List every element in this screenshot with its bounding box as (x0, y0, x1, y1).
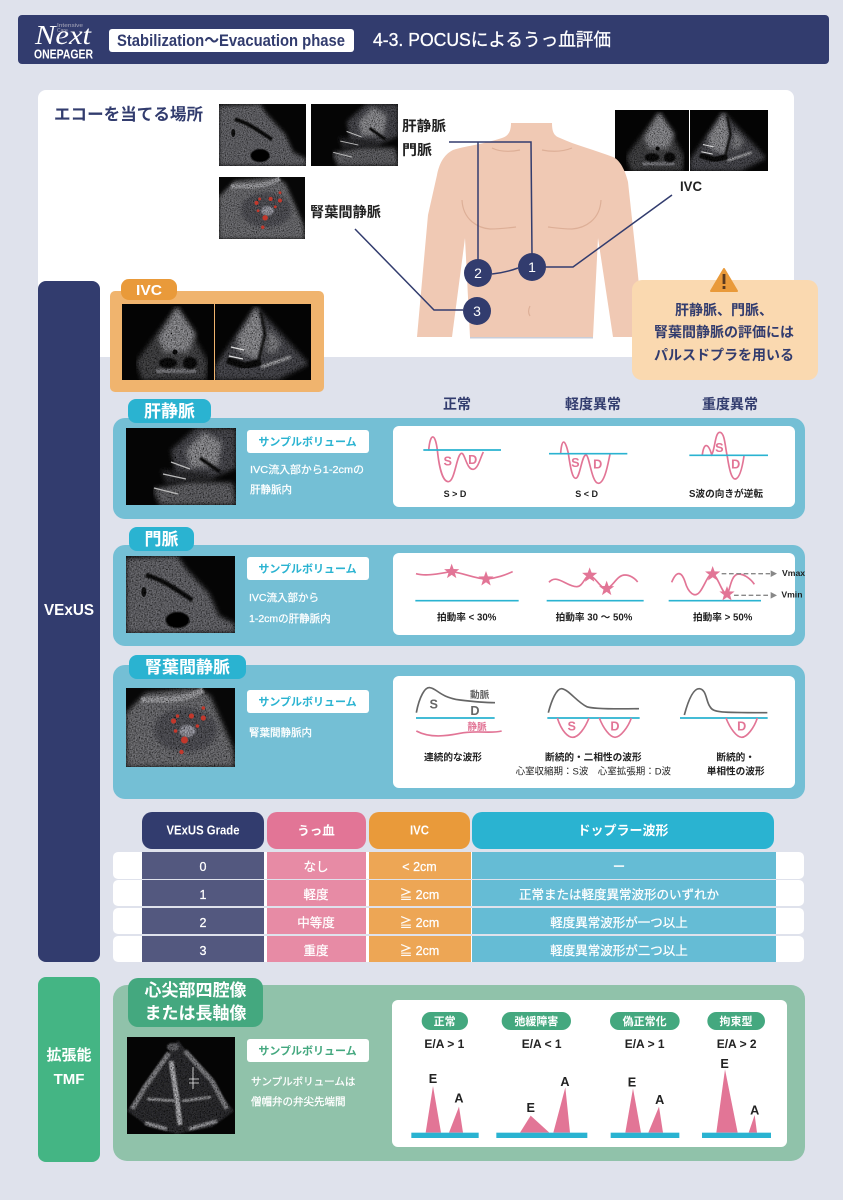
row: grade 3 (113, 936, 804, 962)
row: grade 3: ≧ 2cm (400, 943, 439, 958)
sample volume text: 僧帽弁の弁尖先端間 (251, 1095, 346, 1108)
waveform: pulsatility over 50% (669, 566, 761, 623)
table header: IVC (410, 822, 430, 838)
sidebar: VExUS: VExUS (44, 602, 94, 619)
TMF: restrictive: E/A > 2 (717, 1037, 757, 1051)
waveform: severe S reversal: S (715, 441, 724, 455)
row: grade 2 (113, 908, 804, 934)
logo: Intensive Care Next Onepager: Next (34, 20, 93, 50)
table header: VExUS Grade (166, 822, 240, 838)
sample volume text: IVC流入部から1-2cmの (250, 464, 364, 476)
waveform: mild S<D: S < D (575, 489, 599, 499)
row: grade 0 (113, 852, 804, 879)
callout: pulsed doppler note: パルスドプラを用いる (654, 347, 794, 363)
waveform: severe S reversal: D (731, 458, 740, 472)
TMF: restrictive: 拘束型 (720, 1014, 752, 1028)
echo image: kidney (126, 688, 235, 767)
callout: pulsed doppler note (632, 269, 818, 380)
row: grade 3: 軽度異常波形が二つ以上 (550, 943, 688, 958)
sample volume pill (247, 557, 369, 580)
panel: hepatic vein (113, 399, 805, 519)
sample volume text: 1-2cmの肝静脈内 (249, 612, 331, 625)
waveform: monophasic: D (737, 719, 746, 733)
waveforms: hepatic vein (393, 426, 795, 507)
tab: interlobar vein: 腎葉間静脈 (145, 658, 230, 677)
label: IVC: IVC (680, 178, 702, 194)
TMF: impaired relaxation (496, 1012, 587, 1138)
tab: apical four chamber view: 心尖部四腔像 (144, 981, 246, 1000)
sidebar: VExUS (38, 281, 100, 962)
TMF: normal: E/A > 1 (424, 1037, 465, 1051)
marker 3 (463, 297, 491, 325)
heading: probe placement: エコーを当てる場所 (54, 105, 204, 124)
panel: TMF (113, 978, 805, 1161)
sample volume text: IVC流入部から (249, 592, 319, 604)
logo: Intensive Care Next Onepager (34, 20, 93, 62)
waveform: continuous: 静脈 (467, 721, 487, 733)
waveform: mild S<D: S (571, 456, 580, 470)
echo image: kidney (219, 177, 305, 239)
TMF: pseudonormal: 偽正常化 (623, 1014, 667, 1028)
tab: IVC: IVC (136, 282, 162, 299)
column heading: severe: 重度異常 (702, 396, 758, 412)
marker 1 (518, 253, 546, 281)
marker 2: 2 (474, 265, 482, 281)
Vmin arrow (734, 589, 803, 599)
TMF: normal (411, 1012, 479, 1138)
sidebar: diastolic function TMF (38, 977, 100, 1162)
marker 3: 3 (473, 303, 481, 319)
waveform: continuous (416, 688, 502, 763)
row: grade 1: 軽度 (303, 887, 329, 902)
waveform: normal S>D: S > D (444, 489, 467, 499)
waveform: pulsatility 30-50%: 拍動率 30 〜 50% (556, 611, 633, 623)
TMF: restrictive (702, 1012, 771, 1138)
row: grade 2: 中等度 (297, 915, 335, 930)
TMF: pseudonormal: E (628, 1075, 636, 1089)
TMF: pseudonormal: A (655, 1093, 664, 1107)
column heading: mild: 軽度異常 (565, 396, 621, 412)
logo: Intensive Care Next Onepager: Intensive (57, 23, 83, 29)
TMF: impaired relaxation: 弛緩障害 (514, 1014, 558, 1028)
marker 2 (464, 259, 492, 287)
waveform: mild S<D: D (593, 458, 602, 472)
sample volume text: 肝静脈内 (250, 483, 292, 496)
Vmax arrow: Vmax (782, 568, 805, 578)
waveform: pulsatility over 50%: 拍動率 > 50% (693, 611, 753, 623)
table header: ドップラー波形 (577, 823, 669, 838)
TMF: restrictive: A (750, 1104, 759, 1118)
tab: IVC (121, 279, 177, 300)
TMF: normal: 正常 (434, 1014, 456, 1028)
sample volume pill: サンプルボリューム (258, 562, 357, 576)
waveform: biphasic: D (610, 719, 620, 733)
sample volume pill (247, 690, 369, 713)
echo image: portal vein (219, 104, 306, 166)
tab: interlobar vein (129, 655, 246, 679)
echo image: hepatic vein (126, 428, 236, 505)
panel: IVC (110, 279, 324, 392)
page title: 4-3. POCUSによるうっ血評価 (373, 30, 611, 50)
sample volume pill (247, 430, 369, 453)
TMF: impaired relaxation: E/A < 1 (522, 1037, 562, 1051)
Vmax arrow (722, 568, 805, 578)
tab: portal vein: 門脈 (144, 530, 178, 549)
callout: pulsed doppler note: 腎葉間静脈の評価には (654, 324, 794, 340)
row: grade 2: ≧ 2cm (400, 915, 439, 930)
tab: hepatic vein: 肝静脈 (144, 402, 195, 421)
echo image: apical four chamber (127, 1037, 235, 1134)
icon: warning triangle (711, 269, 737, 291)
table header: うっ血 (297, 823, 335, 838)
table: VExUS grade (113, 812, 804, 962)
waveform: biphasic (516, 689, 672, 778)
marker 1: 1 (528, 259, 536, 275)
echo image: IVC right (215, 304, 311, 380)
row: grade 3: 重度 (303, 943, 329, 958)
row: grade 1: 1 (200, 888, 207, 902)
waveform: continuous: 連続的な波形 (424, 751, 482, 763)
waveform: normal S>D: D (468, 453, 477, 467)
TMF: impaired relaxation: E (526, 1101, 535, 1115)
echo image: hepatic vein (311, 104, 398, 166)
waveform: continuous: 動脈 (470, 689, 490, 701)
waveform: pulsatility 30-50% (547, 567, 644, 623)
waveform: monophasic (680, 689, 768, 778)
waveforms: TMF (392, 1000, 787, 1147)
waveform: normal S>D: S (443, 454, 452, 468)
row: grade 1 (113, 880, 804, 906)
waveform: pulsatility under 30%: 拍動率 < 30% (437, 611, 497, 623)
sample volume text: 腎葉間静脈内 (249, 726, 312, 739)
TMF: pseudonormal: E/A > 1 (625, 1037, 665, 1051)
sample volume pill: サンプルボリューム (258, 436, 357, 448)
waveform: continuous: S (429, 698, 438, 712)
tab: hepatic vein (128, 399, 211, 423)
waveform: severe S reversal (689, 432, 768, 500)
phase pill: Stabilization〜Evacuation phase (117, 32, 345, 50)
TMF: normal: E (429, 1072, 437, 1086)
TMF: impaired relaxation: A (560, 1075, 570, 1089)
waveforms: portal vein (393, 553, 805, 635)
tab: apical four chamber view (128, 978, 263, 1027)
row: grade 0: ー (613, 860, 625, 874)
row: grade 3: 3 (200, 944, 207, 958)
waveform: biphasic: S (567, 719, 576, 733)
column heading: normal: 正常 (443, 396, 471, 412)
waveform: severe S reversal: S波の向きが逆転 (689, 488, 763, 500)
label: portal vein: 門脈 (402, 142, 432, 158)
panel: portal vein (113, 527, 805, 646)
row: grade 0: < 2cm (402, 860, 437, 874)
header bar (18, 15, 829, 64)
sample volume pill: サンプルボリューム (258, 1044, 357, 1058)
TMF: normal: A (454, 1091, 464, 1105)
label: hepatic vein: 肝静脈 (402, 118, 446, 134)
waveform: pulsatility under 30% (415, 564, 519, 623)
connector lines and site markers (355, 142, 672, 325)
sample volume pill (247, 1039, 369, 1062)
waveform: biphasic: 断続的・二相性の波形 (545, 751, 642, 763)
row: grade 0: なし (303, 860, 329, 874)
callout: pulsed doppler note: 肝静脈、門脈、 (675, 302, 773, 318)
TMF: pseudonormal (610, 1012, 680, 1138)
sample volume text (249, 592, 331, 625)
label: interlobar vein: 腎葉間静脈 (310, 204, 381, 220)
tab: apical four chamber view: または長軸像 (144, 1004, 246, 1023)
logo: Intensive Care Next Onepager: Care (57, 28, 68, 34)
row: grade 1: ≧ 2cm (400, 887, 439, 902)
sample volume pill: サンプルボリューム (258, 696, 357, 708)
waveform: mild S<D (549, 442, 627, 499)
sample volume text (251, 1076, 355, 1108)
echo image: portal vein (126, 556, 235, 633)
sample volume text (250, 464, 364, 496)
panel: probe placement (38, 90, 794, 357)
echo image: IVC pair (615, 110, 768, 171)
waveform: continuous: D (470, 704, 480, 718)
table header (142, 812, 774, 849)
tab: portal vein (129, 527, 194, 551)
sample volume text: サンプルボリュームは (251, 1076, 355, 1088)
logo: Intensive Care Next Onepager: ONEPAGER (34, 48, 93, 62)
Vmin arrow: Vmin (781, 589, 803, 599)
row: grade 1: 正常または軽度異常波形のいずれか (519, 887, 719, 902)
waveform: biphasic: 心室収縮期：S波 心室拡張期：D波 (516, 766, 672, 778)
row: grade 2: 2 (200, 916, 207, 930)
waveform: normal S>D (423, 437, 501, 499)
sidebar: diastolic function TMF: 拡張能 (46, 1046, 92, 1064)
TMF: restrictive: E (720, 1057, 729, 1071)
waveform: monophasic: 断続的・ (716, 751, 755, 763)
waveforms: interlobar vein (393, 676, 795, 788)
row: grade 2: 軽度異常波形が一つ以上 (550, 915, 688, 930)
sidebar: diastolic function TMF: TMF (54, 1071, 84, 1088)
echo image: IVC left (122, 304, 214, 380)
row: grade 0: 0 (200, 860, 207, 874)
waveform: monophasic: 単相性の波形 (707, 766, 765, 778)
torso illustration (417, 123, 644, 338)
panel: interlobar vein (113, 655, 805, 799)
